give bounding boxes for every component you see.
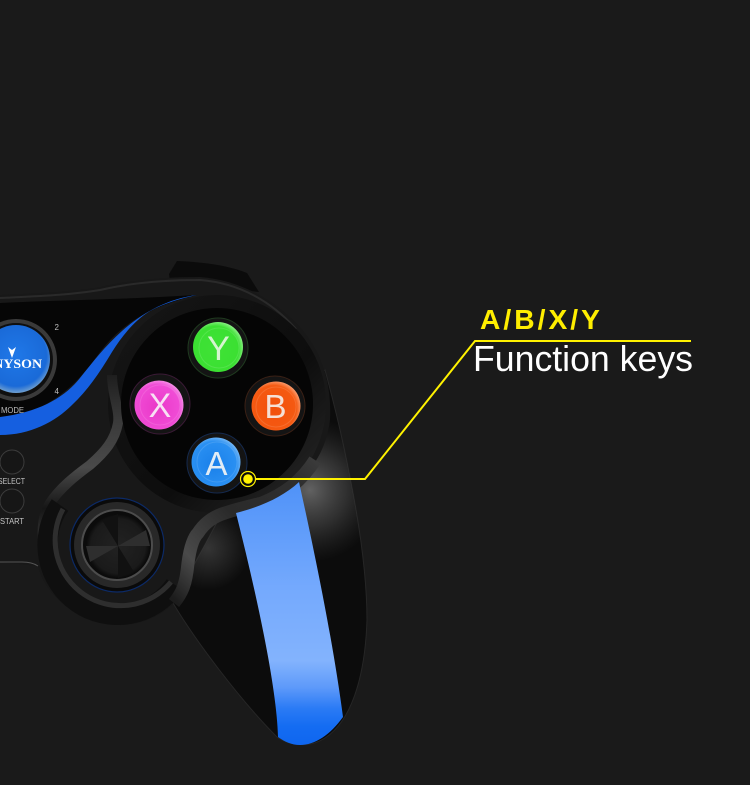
mode dial: [0, 319, 57, 401]
callout heading: A/B/X/Y: [480, 304, 603, 335]
start button: START: [0, 517, 24, 526]
select button: [0, 450, 25, 486]
joystick ring band: [47, 505, 175, 615]
start button: [0, 489, 24, 526]
joystick: [70, 498, 164, 592]
callout leader line: [253, 341, 691, 479]
button X: X: [149, 387, 171, 425]
wire line: [0, 562, 38, 566]
mode labels: 2: [54, 323, 60, 332]
button face outer ring: [108, 295, 326, 513]
infographic canvas: [0, 261, 692, 745]
upper body black panel: [0, 295, 197, 420]
mode labels: [1, 323, 60, 415]
mode labels: 4: [54, 387, 60, 396]
button X: [130, 374, 190, 434]
shoulder trigger: [169, 261, 259, 292]
body top edge highlight: [0, 280, 296, 329]
lower grip rim: [174, 460, 315, 603]
button Y: [188, 318, 248, 378]
S-shaped rim band: [43, 375, 118, 548]
blue swoosh: [0, 295, 197, 435]
button face: [121, 308, 313, 500]
mode labels: MODE: [1, 406, 24, 415]
button A: [187, 433, 247, 493]
gamepad: [0, 261, 380, 760]
grip stripe: [236, 482, 343, 745]
button Y: Y: [207, 330, 230, 368]
button B: [245, 376, 305, 436]
logo mark: [8, 347, 16, 358]
callout anchor dot: [240, 472, 256, 486]
controller body: [0, 277, 330, 625]
callout text: Function keys: [473, 338, 693, 379]
button A: A: [205, 445, 228, 482]
button B: B: [264, 388, 287, 425]
right grip: [173, 370, 368, 745]
